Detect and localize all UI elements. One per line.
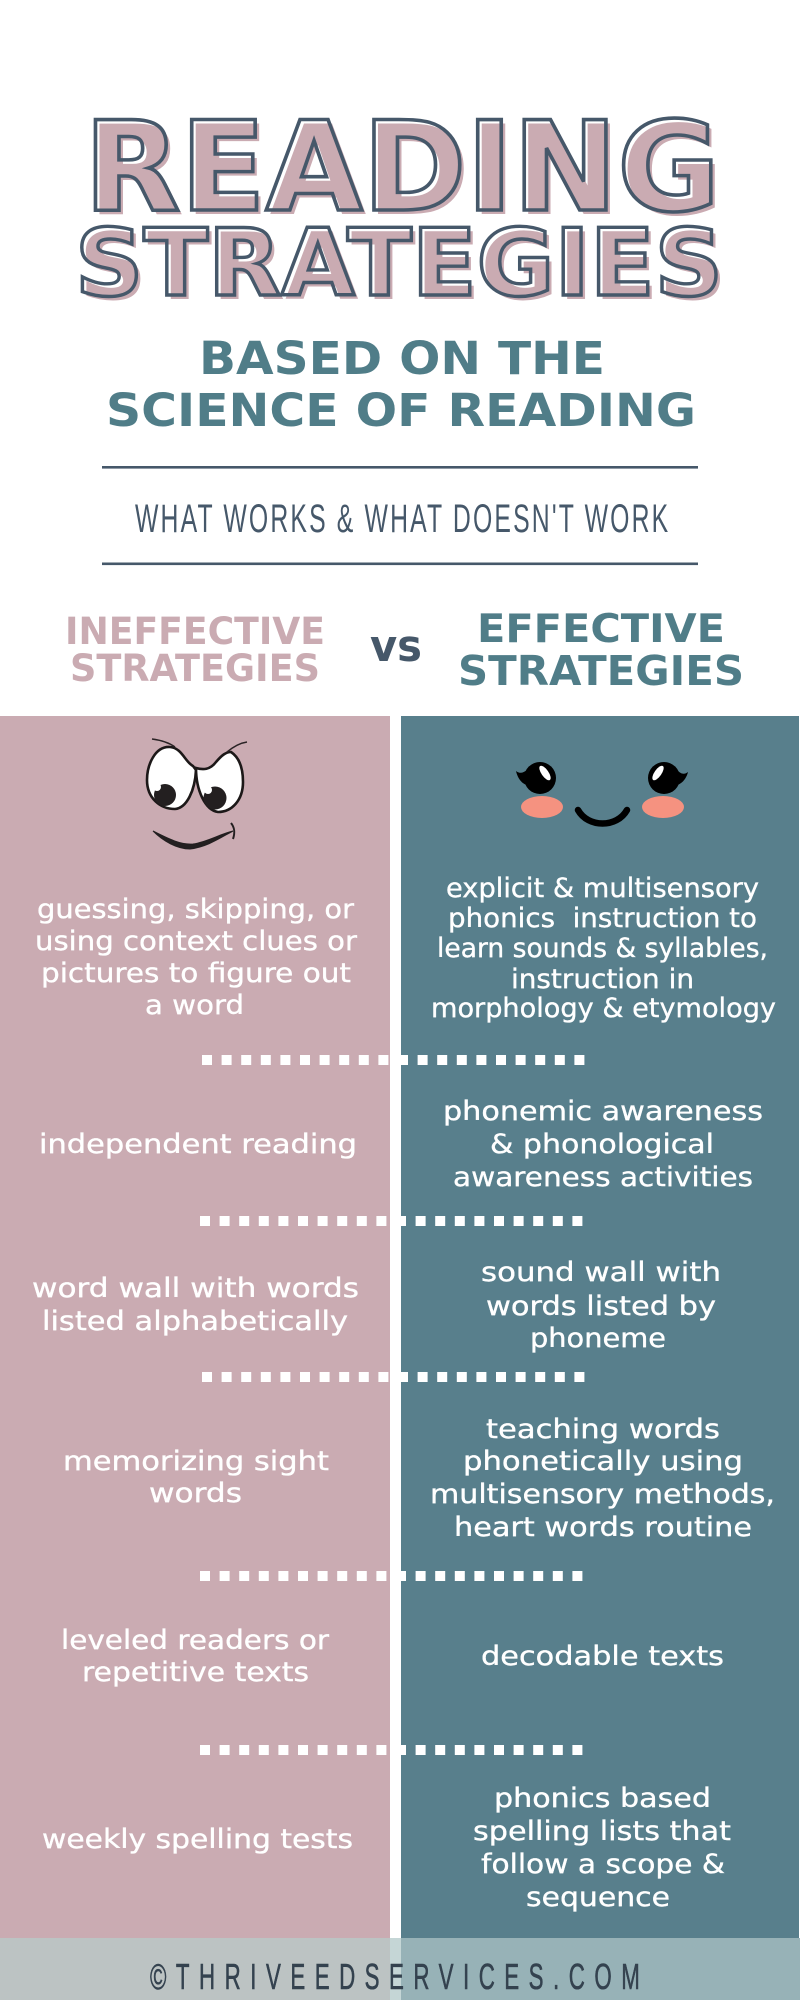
- row 3 right: sound wall: sound wall with: [481, 1257, 721, 1288]
- row 1 right: explicit phonics: explicit & multisensory: [446, 873, 759, 904]
- divider 4: [200, 1571, 585, 1581]
- heading: ineffective strategies: [65, 610, 325, 690]
- row 4 right: teaching words phonetically: [430, 1414, 775, 1543]
- title: reading strategies: READING: [84, 96, 720, 240]
- row 2 left: independent reading: independent reading: [39, 1129, 357, 1160]
- panel: effective column: [401, 716, 799, 1938]
- row 6 right: phonics based spelling lists: follow a scope &: [481, 1849, 725, 1880]
- subtitle: based on the science of reading: BASED ON THE: [199, 332, 605, 385]
- row 3 left: word wall: [32, 1273, 359, 1337]
- row 1 right: explicit phonics: instruction in: [511, 964, 694, 995]
- row 1 right: explicit phonics: learn sounds & syllables,: [437, 933, 768, 964]
- title: reading strategies: [75, 96, 727, 321]
- row 2 right: phonemic awareness: phonemic awareness: [443, 1096, 763, 1127]
- divider 2: [200, 1216, 585, 1226]
- row 1 right: explicit phonics: phonics instruction to: [448, 903, 757, 934]
- row 1 left: guessing: using context clues or: [35, 926, 357, 957]
- row 6 right: phonics based spelling lists: sequence: [526, 1882, 670, 1913]
- row 2 right: phonemic awareness: & phonological: [490, 1129, 714, 1160]
- title: reading strategies: STRATEGIES: [75, 209, 723, 317]
- row 2 right: phonemic awareness: [443, 1096, 763, 1193]
- heading: ineffective strategies: INEFFECTIVE: [65, 610, 325, 653]
- row 1 right: explicit phonics: [431, 873, 776, 1024]
- row 6 left: weekly spelling tests: weekly spelling tests: [42, 1824, 353, 1855]
- row 4 left: memorizing sight words: [63, 1446, 329, 1509]
- row 4 right: teaching words phonetically: heart words routine: [454, 1512, 752, 1543]
- heading: effective strategies: STRATEGIES: [458, 647, 744, 695]
- row 6 right: phonics based spelling lists: phonics based: [494, 1783, 711, 1814]
- row 4 right: teaching words phonetically: teaching words: [486, 1414, 720, 1445]
- row 6 right: phonics based spelling lists: [473, 1783, 731, 1913]
- row 1 right: explicit phonics: morphology & etymology: [431, 993, 776, 1024]
- row 5 left: leveled readers: leveled readers or: [61, 1625, 329, 1656]
- heading: ineffective strategies: STRATEGIES: [70, 647, 320, 690]
- footer band with copyright: [0, 1938, 800, 2000]
- title: reading strategies: READING: [88, 100, 724, 244]
- row 3 left: word wall: listed alphabetically: [42, 1306, 348, 1337]
- divider 5: [200, 1745, 585, 1755]
- row 5 right: decodable texts: decodable texts: [481, 1641, 724, 1672]
- subtitle: based on the science of reading: SCIENCE OF READING: [106, 384, 696, 437]
- footer band with copyright: ©THRIVEEDSERVICES.COM: [150, 1958, 640, 1997]
- icon: angry face: [147, 739, 247, 849]
- row 4 right: teaching words phonetically: phonetically using: [463, 1446, 743, 1477]
- row 4 right: teaching words phonetically: multisensory methods,: [430, 1479, 775, 1510]
- row 6 right: phonics based spelling lists: spelling lists that: [473, 1816, 731, 1847]
- divider 3: [202, 1372, 587, 1382]
- row 5 left: leveled readers: [61, 1625, 329, 1688]
- row 3 right: sound wall: phoneme: [530, 1323, 666, 1354]
- row 1 left: guessing: pictures to figure out: [41, 958, 351, 989]
- row 3 right: sound wall: [481, 1257, 721, 1354]
- panel: ineffective column: [0, 716, 390, 1938]
- row 5 left: leveled readers: repetitive texts: [82, 1657, 309, 1688]
- row 4 left: memorizing sight words: words: [149, 1478, 242, 1509]
- row 1 left: guessing: guessing, skipping, or: [37, 894, 354, 925]
- row 4 left: memorizing sight words: memorizing sight: [63, 1446, 329, 1477]
- row 3 left: word wall: word wall with words: [32, 1273, 359, 1304]
- heading: vs: vs: [370, 621, 422, 672]
- subtitle: based on the science of reading: [106, 332, 696, 437]
- row 2 right: phonemic awareness: awareness activities: [453, 1162, 753, 1193]
- icon: happy face: [516, 762, 688, 824]
- row 1 left: guessing: a word: [145, 990, 244, 1021]
- divider 1: [202, 1055, 587, 1065]
- tagline band: what works and what doesn't work: WHAT WORKS & WHAT DOESN'T WORK: [135, 497, 668, 542]
- row 1 left: guessing: [35, 894, 357, 1021]
- heading: effective strategies: EFFECTIVE: [477, 607, 725, 652]
- title: reading strategies: STRATEGIES: [79, 213, 727, 321]
- row 3 right: sound wall: words listed by: [486, 1291, 716, 1322]
- heading: effective strategies: [458, 607, 744, 695]
